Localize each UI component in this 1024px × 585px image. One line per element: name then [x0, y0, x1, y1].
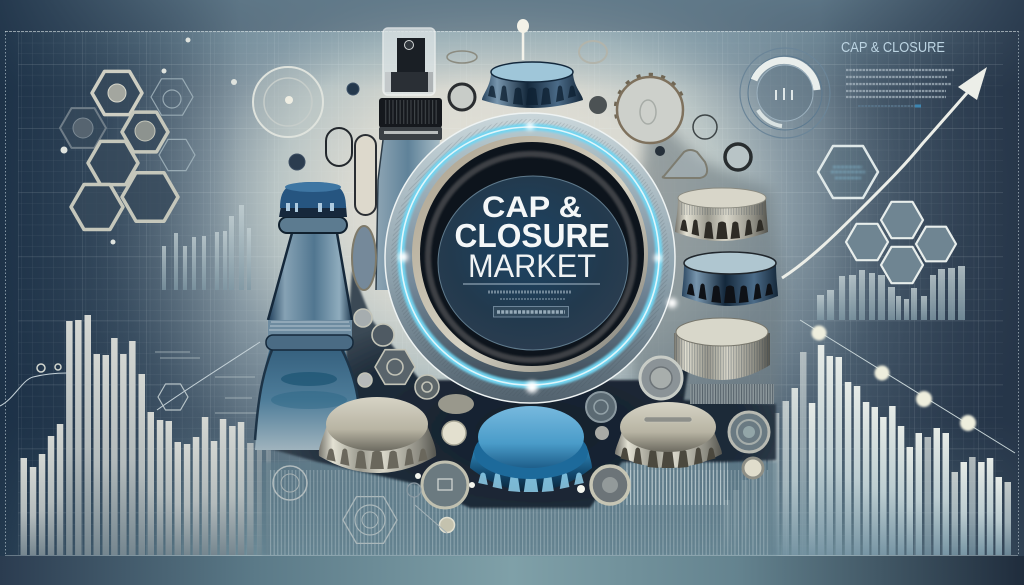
cap: bottom centre blue crown [470, 406, 592, 492]
hexagon cluster: left [60, 38, 237, 244]
vertical stripes: bottom centre [270, 460, 770, 555]
toned band: bottom centre [262, 462, 777, 555]
clips and rings: upper middle [253, 19, 607, 290]
ring: dark disk [420, 142, 644, 366]
cap: gear ring cap [617, 76, 683, 143]
cap: bottom right beige crown [615, 402, 722, 468]
ribbed strip: under right caps [690, 384, 774, 404]
trend lines: left [0, 342, 260, 413]
title: cap and closure market: CAP & [482, 191, 582, 224]
divider and caption placeholder [463, 284, 600, 317]
hexagon cluster: right [818, 146, 956, 283]
trend line with dots: right [800, 320, 1015, 453]
label: cap and closure, top right: CAP & CLOSURE [841, 39, 945, 56]
title: cap and closure market: MARKET [468, 248, 596, 284]
rings: upper right of hub [655, 115, 751, 178]
cap: right ribbed screw cap [674, 318, 770, 380]
spray bottle [376, 28, 442, 290]
lens flares [398, 122, 677, 393]
cap: bottom left beige crown [319, 397, 436, 473]
gauge dial [740, 48, 830, 138]
hub ring: central circle [385, 113, 677, 403]
bar chart: lower right [724, 345, 1011, 555]
title: cap and closure market: CLOSURE [454, 217, 610, 254]
footer band [0, 556, 1024, 585]
metallic panel: right of ring [620, 110, 784, 404]
small bar chart: upper right [817, 266, 965, 320]
discs and washers: around caps [273, 309, 769, 555]
placeholder text lines: top right [846, 70, 954, 106]
ring: metal band [412, 136, 648, 372]
title: cap and closure market [454, 191, 610, 284]
cap: right beige crown [675, 188, 768, 241]
ring: cyan glow [401, 127, 659, 385]
small bar chart: upper left [162, 205, 251, 290]
panel: navy centre [438, 176, 628, 350]
growth arrow [782, 67, 987, 278]
ring: translucent outer [385, 113, 675, 403]
cap: top navy crown [482, 62, 583, 108]
bar chart: lower left [20, 315, 271, 555]
glass bottle [255, 182, 358, 450]
cap: right dark crown [682, 252, 778, 306]
dark circuit panel [256, 270, 776, 508]
